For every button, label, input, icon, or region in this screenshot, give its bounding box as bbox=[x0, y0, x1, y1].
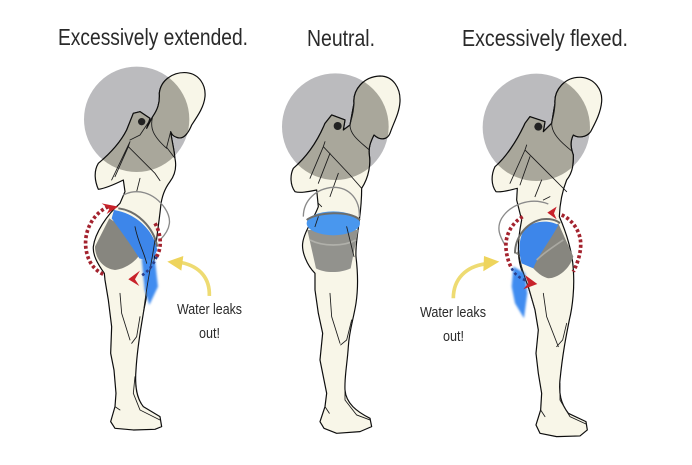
yellow arrow bbox=[167, 256, 209, 296]
bucket handle bbox=[123, 192, 169, 240]
anatomy lines bbox=[510, 103, 586, 424]
title: excessively extended: Excessively extended. bbox=[58, 24, 248, 50]
label: water leaks out (right): Water leaks bbox=[420, 304, 486, 321]
water stream bbox=[142, 258, 158, 305]
body shadow under disc bbox=[497, 82, 590, 181]
weight plate disc bbox=[483, 74, 590, 181]
bucket bbox=[303, 187, 360, 272]
rim bbox=[307, 213, 360, 220]
water in tilted bucket bbox=[112, 210, 157, 262]
red arrowheads bbox=[523, 207, 557, 289]
label: water leaks out (left) bbox=[177, 301, 242, 342]
body silhouette bbox=[492, 77, 602, 437]
yellow arrow bbox=[453, 256, 499, 298]
label: water leaks out (right): out! bbox=[443, 328, 464, 345]
title: neutral: Neutral. bbox=[307, 25, 375, 51]
dotted red rotation arc bbox=[86, 207, 108, 275]
water stream bbox=[512, 267, 527, 318]
rim bbox=[118, 208, 157, 247]
body shadow under disc bbox=[102, 77, 190, 172]
rim bbox=[515, 219, 560, 253]
hand and bar end bbox=[534, 123, 542, 131]
title: excessively flexed: Excessively flexed. bbox=[462, 25, 628, 51]
bucket body bbox=[307, 230, 358, 272]
thigh line over water bbox=[518, 250, 535, 310]
bucket body bbox=[515, 223, 573, 278]
weight plate disc bbox=[282, 73, 389, 180]
figure: neutral bbox=[282, 73, 400, 433]
water in tilted bucket bbox=[519, 222, 558, 268]
bucket body bbox=[95, 218, 153, 270]
bucket handle bbox=[303, 187, 359, 217]
bucket bbox=[499, 201, 573, 278]
hand and bar end bbox=[138, 118, 145, 125]
hand and bar end bbox=[334, 122, 342, 130]
thigh lines over bucket bbox=[315, 217, 354, 257]
red arrowheads bbox=[102, 203, 140, 286]
water surface bbox=[307, 211, 360, 235]
weight plate disc bbox=[84, 67, 189, 172]
figure: excessively flexed bbox=[453, 74, 602, 437]
body silhouette bbox=[93, 73, 205, 430]
figure: excessively extended bbox=[84, 67, 209, 430]
label: water leaks out (right) bbox=[420, 304, 486, 345]
label: water leaks out (left): Water leaks bbox=[177, 301, 242, 318]
body shadow under disc bbox=[297, 81, 389, 180]
bucket ridge bbox=[537, 240, 563, 260]
label: water leaks out (left): out! bbox=[199, 325, 220, 342]
bucket bbox=[95, 192, 169, 270]
dotted red rotation arc bbox=[562, 215, 581, 272]
anatomy lines bbox=[310, 103, 370, 420]
thigh front line over water bbox=[135, 227, 155, 313]
bucket ridge bbox=[310, 240, 356, 245]
bucket handle bbox=[499, 201, 548, 245]
anatomy lines bbox=[112, 117, 175, 420]
body silhouette bbox=[291, 76, 400, 433]
